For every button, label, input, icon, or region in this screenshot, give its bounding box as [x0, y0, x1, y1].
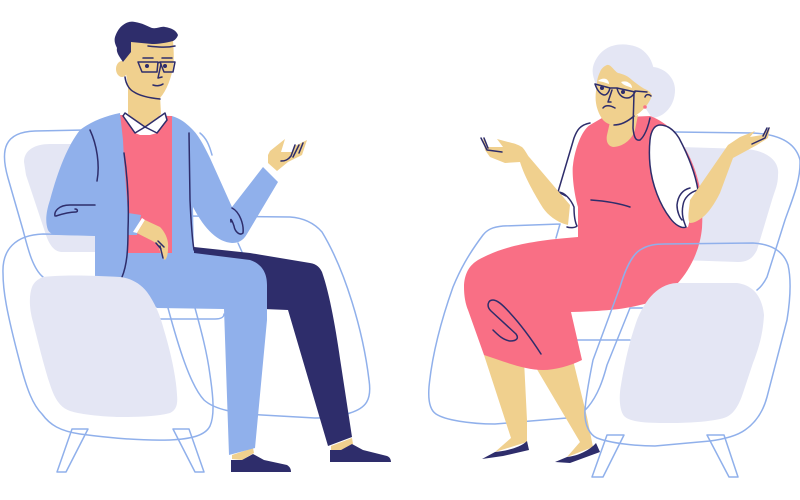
woman: hair bun	[640, 67, 675, 118]
man: ear	[116, 61, 128, 77]
man: back trouser leg	[194, 247, 352, 446]
woman: right sleeve	[650, 125, 698, 228]
man: face lines	[125, 46, 175, 99]
woman: left sleeve outline	[558, 123, 590, 228]
woman: earring	[643, 105, 647, 109]
man: glasses	[138, 62, 175, 72]
woman: face	[596, 65, 652, 125]
woman: glasses and cord	[595, 84, 650, 140]
woman: right sleeve outline	[649, 125, 698, 228]
man: jacket lines	[55, 130, 243, 277]
man: hand fingers	[156, 143, 303, 258]
man: hair	[115, 22, 178, 62]
woman: dress	[464, 116, 702, 370]
woman: right arm and hand	[688, 127, 770, 223]
man: raised hand	[268, 139, 307, 171]
man: back shoe and sock	[330, 438, 391, 462]
man: front shoe and sock	[231, 448, 291, 472]
man: neck	[128, 80, 161, 130]
man: jacket and sleeves	[46, 113, 278, 277]
woman: back shoe	[482, 441, 529, 459]
woman: back leg	[484, 355, 527, 452]
left armchair front cushion	[30, 276, 177, 417]
woman: left sleeve	[558, 123, 590, 227]
woman: front shoe	[555, 443, 600, 463]
woman: hair	[593, 44, 654, 100]
man: sweater	[118, 115, 174, 253]
woman: right hand fingers	[752, 128, 769, 144]
man	[46, 22, 391, 472]
woman: dress lines	[488, 200, 630, 354]
man: cuff	[133, 218, 145, 233]
woman	[464, 44, 770, 463]
woman: eyebrows	[598, 79, 632, 88]
woman: left arm and hand	[483, 138, 570, 225]
woman: front leg	[535, 360, 593, 457]
woman: chest	[607, 115, 638, 147]
man: collar	[123, 113, 167, 135]
woman: face lines	[603, 90, 651, 108]
man: resting hand	[137, 220, 168, 260]
man: front trouser leg	[120, 252, 267, 455]
woman: left hand fingers	[481, 138, 502, 152]
armchair front of woman	[585, 243, 790, 477]
man: face	[124, 38, 174, 99]
left armchair	[3, 130, 370, 472]
armchair rear of woman	[429, 132, 800, 424]
man: forearm	[60, 212, 141, 235]
